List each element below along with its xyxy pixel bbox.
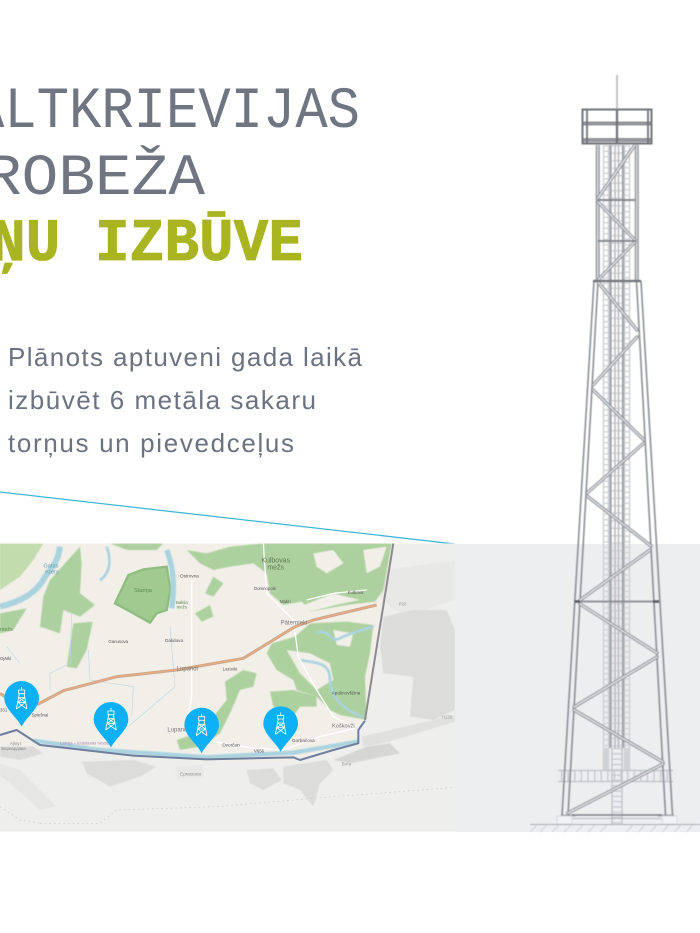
body line 1: Plānots aptuveni gada laikā <box>8 342 363 372</box>
map marker 3 <box>184 708 219 753</box>
map <box>0 543 455 832</box>
map: place labels: Pāternieki <box>281 620 307 626</box>
map: place labels: H226 <box>442 715 453 720</box>
map: place labels: Вята <box>342 762 352 767</box>
tower: horizontal joints <box>574 200 659 602</box>
map: place labels: Baklia <box>176 600 188 605</box>
map: place labels: Аўхут <box>10 741 21 746</box>
body line 2: izbūvēt 6 metāla sakaru <box>8 385 316 415</box>
map: place labels: ezers <box>45 569 59 575</box>
tower: diagonal braces <box>568 145 663 813</box>
map: protected forest Stariņa <box>115 567 171 623</box>
title <box>0 80 360 279</box>
map: place labels: Dalidova <box>165 638 184 643</box>
map: place labels: Lupandi <box>177 667 198 673</box>
tower: upper shaft legs <box>596 145 638 281</box>
map: place labels: mežs <box>0 627 13 633</box>
map: place labels: Lazovki <box>223 666 237 671</box>
map: place labels <box>0 557 453 777</box>
map: railway and district lines <box>0 787 455 823</box>
map: place labels: P20 <box>399 601 407 606</box>
map: place labels: 331 <box>0 708 8 713</box>
tower: base and foundations <box>557 815 677 824</box>
map: place labels: Ojārki <box>0 656 11 661</box>
map: place labels: Spiešnai <box>32 713 48 718</box>
map: water <box>0 547 373 757</box>
map: place labels: Koškovži <box>332 724 355 730</box>
map: place labels: Ganusova <box>108 639 129 644</box>
map: place labels: Gatas <box>43 563 59 569</box>
tower: lower walkway platform <box>558 770 673 782</box>
map: place labels: Dvorčan <box>222 743 240 748</box>
map: place labels: mežs <box>267 564 285 571</box>
map: place labels: Apolinovščina <box>332 690 361 695</box>
map marker 2 <box>94 702 128 748</box>
map: place labels: Lupandi <box>167 727 189 733</box>
map: place labels: mežs <box>177 605 187 610</box>
tower: ground line and hatching <box>530 824 700 832</box>
tower: central ladders <box>604 145 630 824</box>
tower drawing <box>530 75 700 832</box>
grey ground band <box>455 544 700 832</box>
map: place labels: Kulbovas <box>261 557 291 564</box>
map: place labels: Kulbova <box>348 590 364 595</box>
map: place labels: Барнардава <box>1 746 26 751</box>
body text <box>8 342 363 458</box>
map: minor roads <box>185 543 367 750</box>
map: forest clearings <box>287 547 387 690</box>
map: place labels: Domnopole <box>254 586 277 591</box>
title line 3: ŅU IZBŪVE <box>0 211 303 279</box>
tower: lower legs <box>562 281 672 815</box>
map: place labels: Ostrovna <box>180 574 199 579</box>
map: main road <box>0 605 377 704</box>
map: state border <box>0 543 393 760</box>
map: streams <box>7 613 175 727</box>
map: place labels: Stariņa <box>134 588 153 594</box>
map: place labels: Ермакова <box>180 772 202 777</box>
map: forests <box>0 543 392 750</box>
map: neighbouring territory <box>0 543 455 832</box>
map marker 1 <box>4 681 39 727</box>
map: place labels: Makri <box>280 599 291 604</box>
callout line from tower to map <box>0 492 455 544</box>
map: place labels: V656 <box>254 748 265 753</box>
map marker 4 <box>263 706 298 752</box>
map: place labels: Latvija – Krāslavas novads <box>60 741 111 746</box>
tower: top platform <box>582 110 652 144</box>
map: place labels: Gorbačova <box>292 738 315 743</box>
body line 3: torņus un pievedceļus <box>8 428 294 458</box>
tower: antenna <box>616 75 618 109</box>
